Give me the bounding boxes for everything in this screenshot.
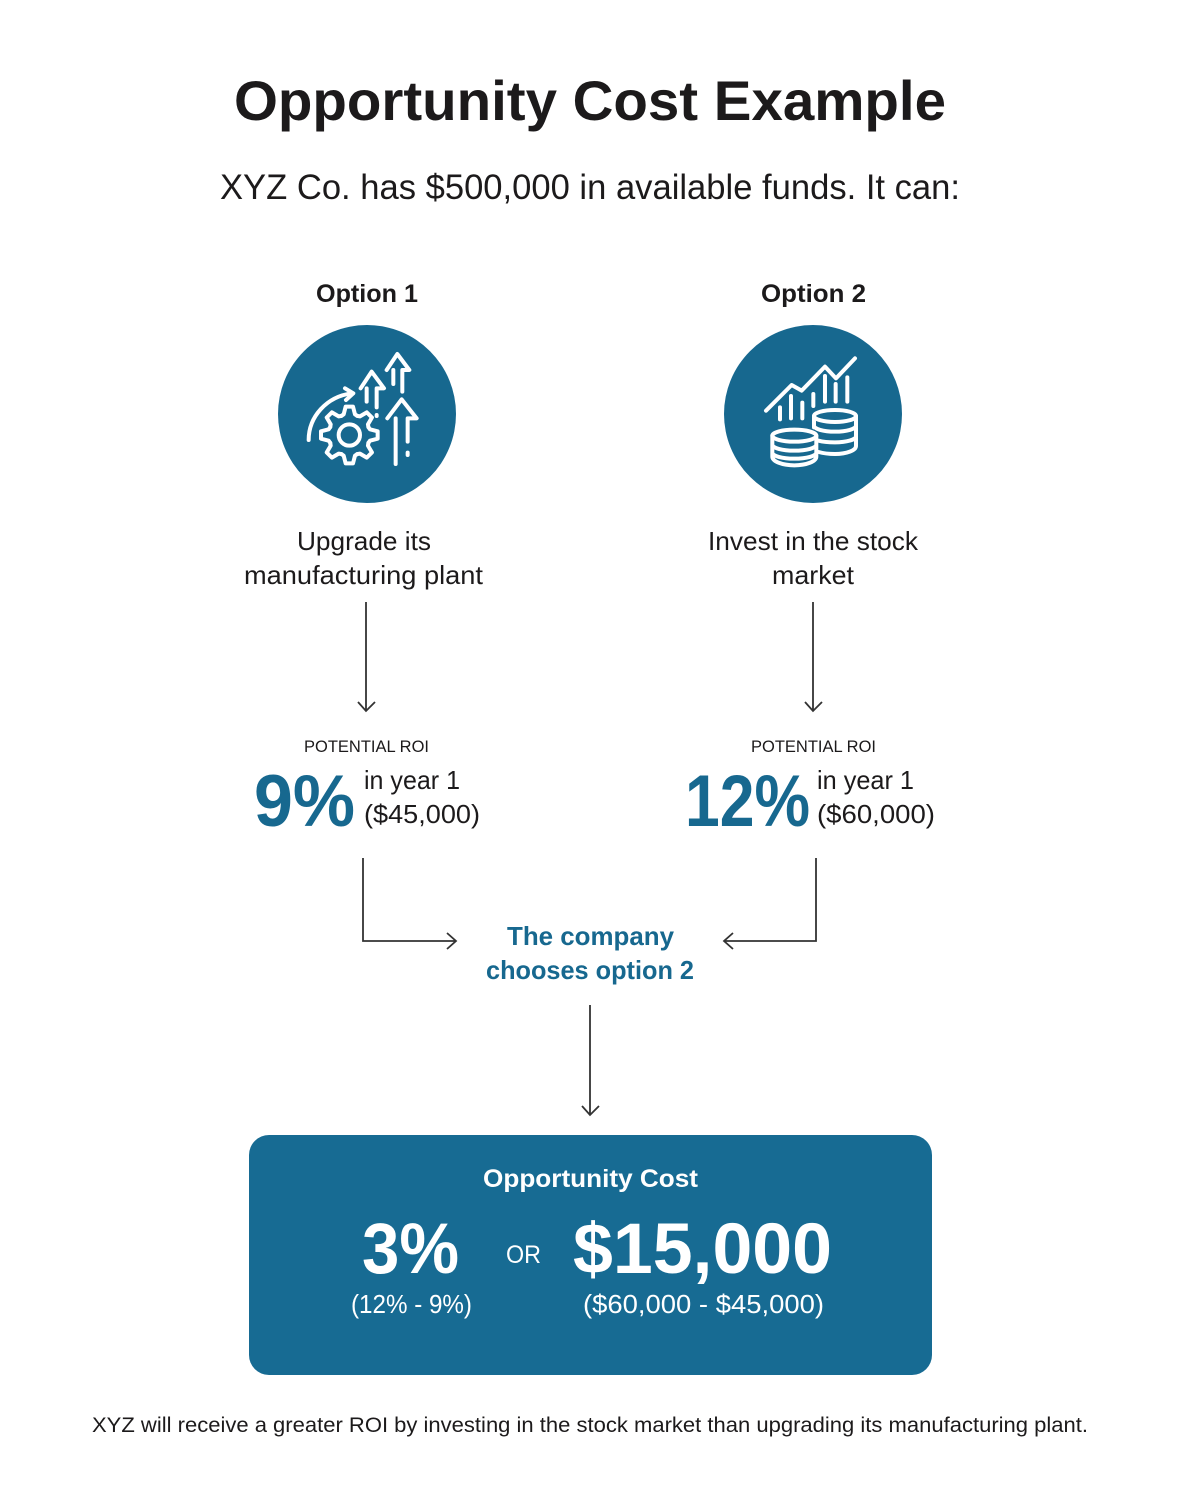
option 2 description: Invest in the stock (708, 526, 919, 556)
option 1 heading: Option 1 (316, 280, 418, 308)
arrow: option 1 to decision (363, 858, 456, 949)
option 2 ROI detail: ($60,000) (817, 799, 935, 829)
decision text: The company (507, 921, 675, 951)
decision text (486, 921, 694, 985)
option 2 ROI detail: in year 1 (817, 765, 914, 795)
option 1 ROI value: 9% (254, 761, 355, 842)
decision text: chooses option 2 (486, 955, 694, 985)
arrow: decision to result (582, 1005, 599, 1115)
title: Opportunity Cost Example (234, 69, 946, 132)
option 1 ROI detail: in year 1 (364, 765, 460, 795)
percentage result: 3% (362, 1210, 459, 1289)
option 2 description: market (772, 560, 855, 590)
result heading: Opportunity Cost (483, 1165, 699, 1193)
panel: option 1 (244, 280, 484, 949)
percentage formula: (12% - 9%) (351, 1289, 472, 1319)
arrow: option 1 to ROI (358, 602, 375, 711)
option 1 ROI label: POTENTIAL ROI (304, 737, 429, 756)
dollar formula: ($60,000 - $45,000) (583, 1289, 824, 1319)
option 1 ROI detail (364, 765, 480, 829)
option 1 description: manufacturing plant (244, 560, 484, 590)
option 2 heading: Option 2 (761, 280, 866, 308)
dollar result: $15,000 (573, 1210, 832, 1289)
option 2 description (708, 526, 919, 590)
option 1 description: Upgrade its (297, 526, 431, 556)
option 2 ROI detail (817, 765, 935, 829)
arrow: option 2 to decision (724, 858, 816, 949)
icon: gear and rising arrows (278, 325, 456, 503)
arrow: option 2 to ROI (805, 602, 822, 711)
panel: option 2 (685, 280, 935, 949)
footer note: XYZ will receive a greater ROI by investing in the stock market than upgrading its manufacturing plant. (92, 1413, 1088, 1437)
subtitle: XYZ Co. has $500,000 in available funds. It can: (220, 168, 960, 207)
or separator: OR (506, 1241, 541, 1269)
option 2 ROI label: POTENTIAL ROI (751, 737, 876, 756)
option 1 description (244, 526, 484, 590)
option 1 ROI detail: ($45,000) (364, 799, 480, 829)
panel: opportunity cost (249, 1135, 932, 1375)
option 2 ROI value: 12% (685, 761, 810, 842)
icon: coins and growth chart (724, 325, 902, 503)
